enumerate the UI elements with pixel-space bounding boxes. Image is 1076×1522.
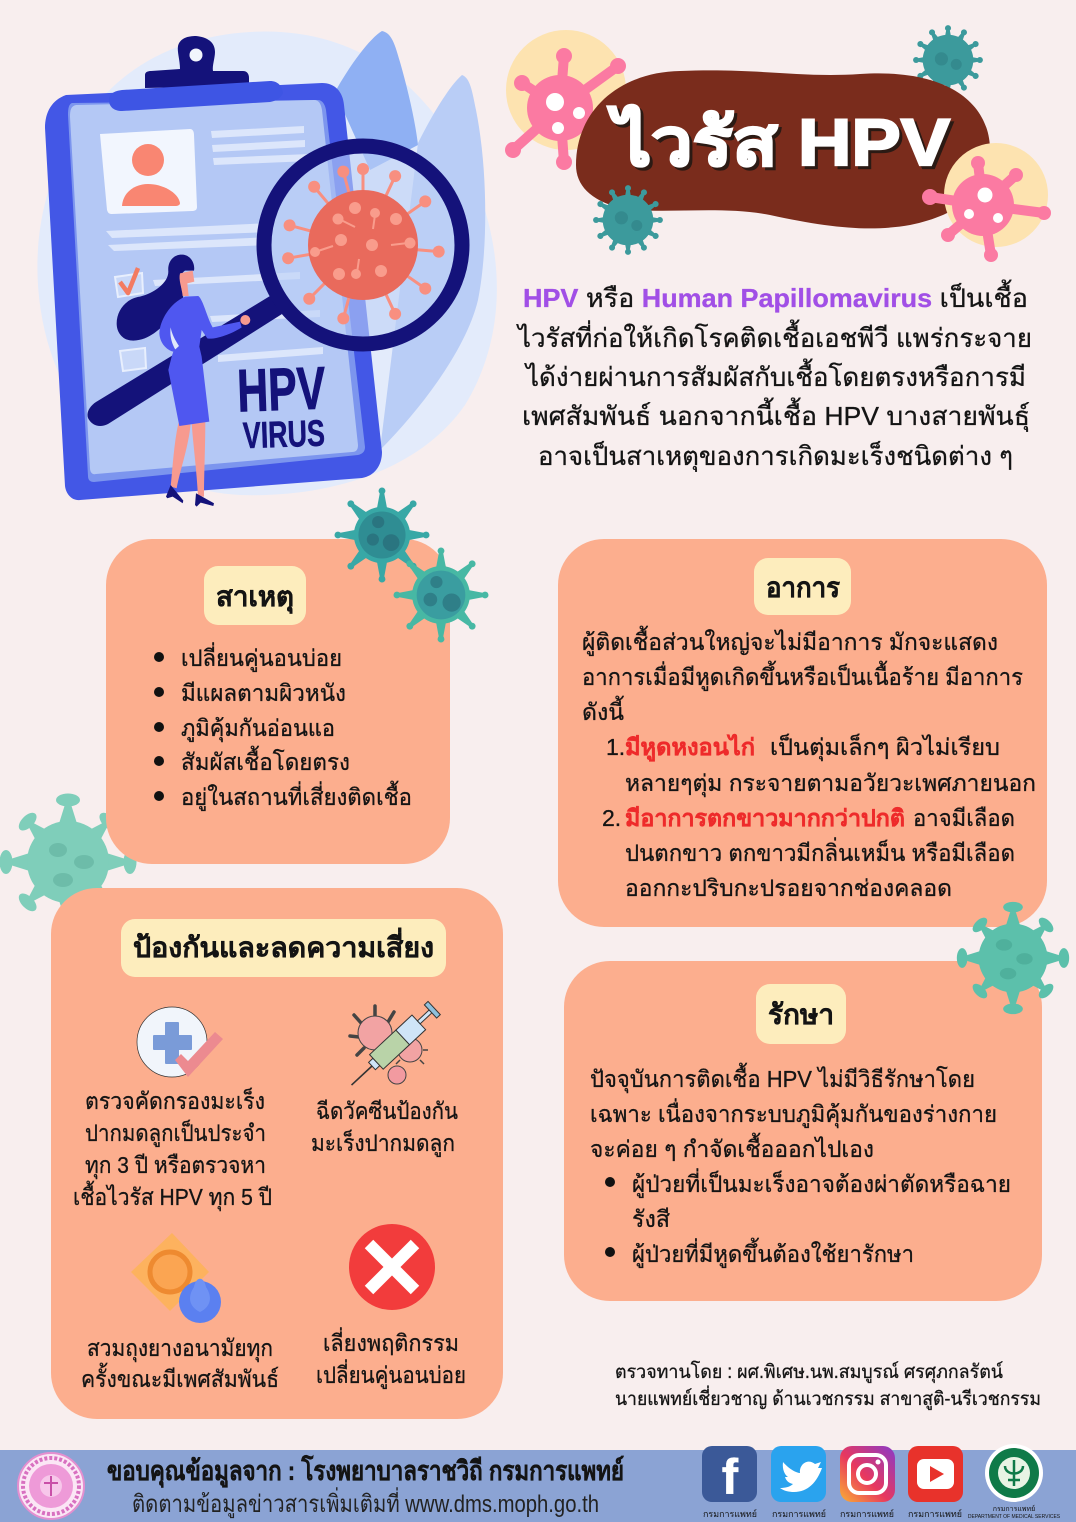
- icon: instagram: [840, 1446, 895, 1519]
- prevention text: condom: สวมถุงยางอนามัยทุก: [87, 1335, 273, 1362]
- profile icon: [122, 144, 180, 206]
- symptoms text: อาจมีเลือด: [913, 805, 1015, 831]
- footer thanks text: ขอบคุณข้อมูลจาก : โรงพยาบาลราชวิถี กรมการแพทย์: [107, 1454, 624, 1488]
- prevention text: screening: เชื้อไวรัส HPV ทุก 5 ปี: [73, 1181, 272, 1211]
- arm gap: [170, 327, 179, 349]
- red virus: [281, 163, 445, 326]
- dress: [159, 296, 242, 426]
- causes list: [154, 642, 412, 811]
- clipboard clip: [145, 36, 249, 88]
- small virus: [396, 1032, 428, 1064]
- title decoration: pink virus right: [922, 143, 1051, 262]
- icon: twitter: [771, 1446, 826, 1519]
- leaf dark: [335, 31, 418, 170]
- icon: condom: [131, 1233, 221, 1323]
- logo: ministry of public health: กรมการแพทย์: [993, 1505, 1035, 1513]
- prevention text: screening: [73, 1086, 272, 1211]
- prevention text: avoid: เลี่ยงพฤติกรรม: [323, 1327, 459, 1356]
- intro paragraph: อาจเป็นสาเหตุของการเกิดมะเร็งชนิดต่าง ๆ: [538, 440, 1013, 472]
- symptoms text: ปนตกขาว ตกขาวมีกลิ่นเหม็น หรือมีเลือด: [625, 837, 1015, 866]
- prevention text: vaccine: มะเร็งปากมดลูก: [311, 1128, 455, 1157]
- symptoms text: หลายๆตุ่ม กระจายตามอวัยวะเพศภายนอก: [625, 770, 1036, 797]
- virus green right: [957, 902, 1069, 1014]
- virus teal two: [394, 548, 488, 642]
- credit text: นายแพทย์เชี่ยวชาญ ด้านเวชกรรม สาขาสูติ-นรีเวชกรรม: [615, 1385, 1041, 1410]
- symptoms heading: [754, 558, 851, 615]
- symptoms text: ผู้ติดเชื้อส่วนใหญ่จะไม่มีอาการ มักจะแสดง: [582, 626, 998, 656]
- panel: treatment: [564, 961, 1042, 1301]
- icon: medical check: [137, 1007, 223, 1077]
- HPV VIRUS label: VIRUS: [242, 412, 326, 456]
- symptoms text: [582, 626, 1036, 901]
- checkbox ticked: [115, 268, 143, 297]
- hair: [117, 255, 194, 341]
- form lines: [106, 126, 323, 362]
- credit text: ตรวจทานโดย : ผศ.พิเศษ.นพ.สมบูรณ์ ศรศุภกลรัตน์: [615, 1360, 1003, 1384]
- intro paragraph: ไวรัสที่ก่อให้เกิดโรคติดเชื้อเอชพีวี แพร่กระจาย: [516, 319, 1032, 353]
- panel: prevention: [51, 888, 503, 1419]
- icon: instagram: กรมการแพทย์: [840, 1508, 894, 1519]
- large virus: [350, 1006, 394, 1055]
- treatment text: จะค่อย ๆ กำจัดเชื้อออกไปเอง: [590, 1133, 874, 1162]
- magnifier lens: [263, 145, 463, 345]
- treatment text: เฉพาะ เนื่องจากระบบภูมิคุ้มกันของร่างกาย: [590, 1098, 997, 1128]
- symptoms text: เป็นตุ่มเล็กๆ ผิวไม่เรียบ: [770, 732, 1000, 761]
- shoes: [166, 485, 214, 507]
- virus teal one: [334, 488, 430, 582]
- face: [180, 271, 194, 296]
- syringe: [345, 1001, 441, 1092]
- profile card: [100, 129, 197, 214]
- icon: facebook: กรมการแพทย์: [703, 1508, 757, 1519]
- causes heading: สาเหตุ: [216, 581, 294, 614]
- hand: [240, 315, 250, 325]
- title blob: [576, 70, 990, 228]
- treatment text: รังสี: [632, 1206, 670, 1232]
- treatment text: ผู้ป่วยที่มีหูดขึ้นต้องใช้ยารักษา: [632, 1238, 914, 1268]
- clipboard top band: [109, 81, 283, 111]
- icon: youtube: กรมการแพทย์: [908, 1508, 962, 1519]
- title decoration: teal virus top: [913, 25, 983, 95]
- causes list: อยู่ในสถานที่เสี่ยงติดเชื้อ: [181, 781, 412, 811]
- leaf light: [380, 75, 485, 450]
- prevention heading: [121, 919, 446, 977]
- prevention text: avoid: [316, 1327, 466, 1389]
- prevention text: screening: ตรวจคัดกรองมะเร็ง: [85, 1086, 265, 1114]
- treatment text: ผู้ป่วยที่เป็นมะเร็งอาจต้องผ่าตัดหรือฉาย: [632, 1168, 1011, 1198]
- symptoms heading: อาการ: [766, 572, 840, 603]
- intro paragraph: เพศสัมพันธ์ นอกจากนี้เชื้อ HPV บางสายพันธุ์: [522, 397, 1030, 432]
- intro paragraph: [516, 279, 1032, 472]
- panel: causes: [106, 539, 450, 864]
- causes list: สัมผัสเชื้อโดยตรง: [181, 746, 350, 775]
- icon: youtube: [908, 1446, 963, 1519]
- footer bar: [0, 1444, 1076, 1522]
- prevention text: condom: ครั้งขณะมีเพศสัมพันธ์: [81, 1363, 279, 1392]
- prevention text: condom: [81, 1335, 279, 1392]
- illustration: clipboard with magnifier and woman: [37, 31, 497, 507]
- symptoms text: 2.: [602, 805, 621, 831]
- causes list: ภูมิคุ้มกันอ่อนแอ: [181, 715, 335, 742]
- credit text: [615, 1360, 1041, 1410]
- HPV VIRUS label: HPV: [236, 354, 326, 424]
- prevention text: vaccine: ฉีดวัคซีนป้องกัน: [316, 1098, 458, 1124]
- treatment text: [590, 1063, 1011, 1268]
- hospital logo: [18, 1453, 84, 1519]
- footer follow text: ติดตามข้อมูลข่าวสารเพิ่มเติมที่ www.dms.moph.go.th: [132, 1487, 599, 1519]
- clipboard paper: [68, 100, 365, 482]
- intro paragraph: HPV หรือ Human Papillomavirus เป็นเชื้อ: [523, 279, 1028, 313]
- icon: twitter: กรมการแพทย์: [772, 1508, 826, 1519]
- symptoms text: ดังนี้: [582, 696, 624, 725]
- checkbox empty: [120, 348, 146, 371]
- logo: ministry of public health: DEPARTMENT OF MEDICAL SERVICES: [968, 1514, 1061, 1520]
- symptoms text: ออกกะปริบกะปรอยจากช่องคลอด: [625, 875, 952, 901]
- causes list: มีแผลตามผิวหนัง: [181, 680, 346, 706]
- causes heading: [204, 566, 306, 625]
- title decoration: pink virus left: [505, 30, 626, 170]
- title text: ไวรัส HPV: [607, 104, 950, 179]
- prevention text: avoid: เปลี่ยนคู่นอนบ่อย: [316, 1359, 466, 1389]
- intro paragraph: ได้ง่ายผ่านการสัมผัสกับเชื้อโดยตรงหรือการมี: [524, 358, 1026, 392]
- logo: ministry of public health: [968, 1444, 1061, 1520]
- treatment heading: [756, 984, 846, 1044]
- icon: facebook: f: [722, 1449, 739, 1505]
- symptoms text: มีหูดหงอนไก่: [625, 733, 755, 762]
- title decoration: teal virus bottom: [593, 185, 663, 255]
- legs: [171, 422, 205, 497]
- HPV VIRUS label: [236, 354, 328, 456]
- treatment text: ปัจจุบันการติดเชื้อ HPV ไม่มีวิธีรักษาโดย: [590, 1063, 975, 1093]
- prevention text: vaccine: [311, 1098, 458, 1157]
- prevention text: screening: ปากมดลูกเป็นประจำ: [85, 1118, 266, 1147]
- magnifier handle: [87, 296, 282, 426]
- woman figure: [117, 255, 250, 507]
- causes list: เปลี่ยนคู่นอนบ่อย: [181, 642, 342, 672]
- prevention text: screening: ทุก 3 ปี หรือตรวจหา: [85, 1152, 266, 1179]
- icon: facebook: [702, 1446, 757, 1519]
- virus behind prevention panel: [0, 794, 136, 930]
- symptoms text: มีอาการตกขาวมากกว่าปกติ: [625, 805, 905, 831]
- prevention heading: ป้องกันและลดความเสี่ยง: [133, 927, 434, 963]
- treatment heading: รักษา: [768, 999, 834, 1030]
- icon: red cross: [349, 1224, 435, 1310]
- panel: symptoms: [558, 539, 1047, 927]
- background blob: [37, 32, 497, 495]
- round cell: [388, 1066, 406, 1084]
- virus teal pair: [334, 488, 488, 642]
- symptoms text: อาการเมื่อมีหูดเกิดขึ้นหรือเป็นเนื้อร้าย มีอาการ: [582, 661, 1023, 691]
- icon: vaccine syringe: [345, 1001, 441, 1092]
- clipboard board: [45, 83, 382, 500]
- symptoms text: 1.: [606, 734, 625, 760]
